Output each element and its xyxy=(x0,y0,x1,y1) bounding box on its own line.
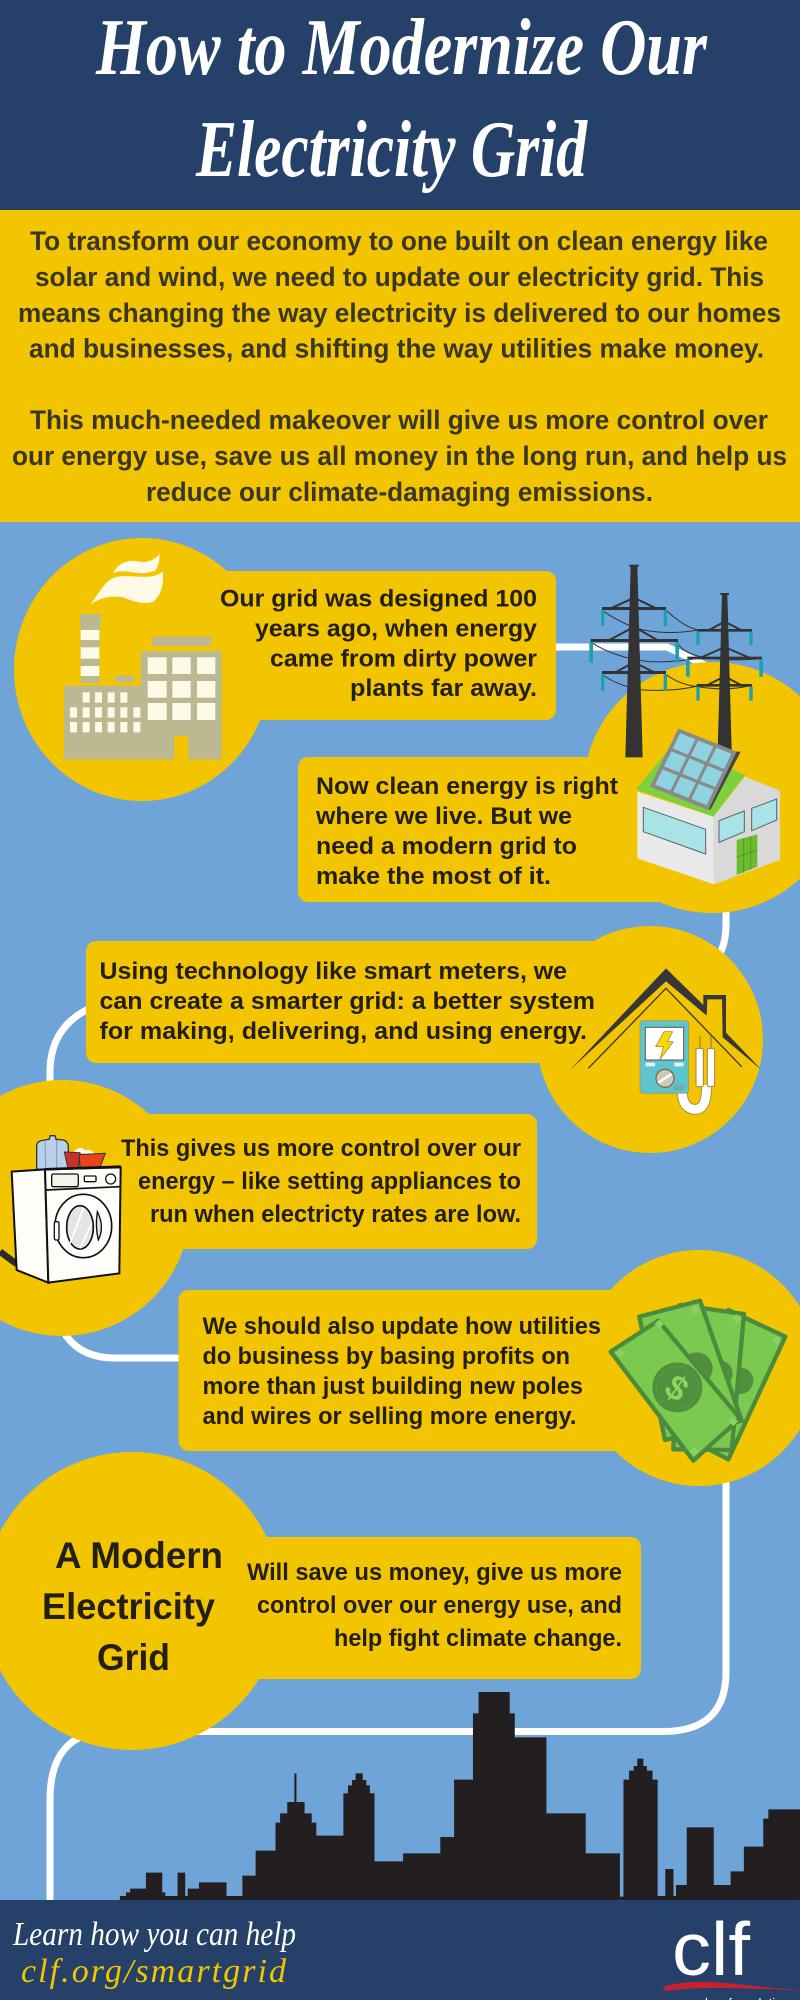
text: old grid: Our grid was designed 100 xyxy=(220,586,537,612)
text: old grid xyxy=(220,586,538,702)
text: benefits xyxy=(247,1559,622,1652)
text: smart grid xyxy=(100,958,595,1045)
text: utilities business model: do business by basing profits on xyxy=(202,1343,570,1370)
icon: factory xyxy=(64,554,222,759)
intro paragraph two: This much-needed makeover will give us more control over xyxy=(30,405,768,435)
intro paragraph one: means changing the way electricity is delivered to our homes xyxy=(18,298,781,328)
call to action: Learn how you can help xyxy=(12,1916,296,1953)
heading: a modern electricity grid: A Modern xyxy=(55,1535,223,1576)
panel: utilities business model xyxy=(178,1250,800,1486)
text: clean energy at home: where we live. But we xyxy=(315,803,572,830)
header banner xyxy=(0,0,800,210)
icon: transmission towers xyxy=(589,565,763,757)
icon: smoke xyxy=(90,554,163,605)
text: clean energy at home: Now clean energy is right xyxy=(316,773,618,800)
intro paragraph one xyxy=(18,226,781,364)
icon: smart meter in house xyxy=(570,968,762,1109)
panel: old grid xyxy=(14,538,556,801)
text: smart grid: Using technology like smart meters, we xyxy=(100,958,567,985)
text: utilities business model: We should also update how utilities xyxy=(202,1313,601,1340)
panel: smart grid xyxy=(86,926,763,1153)
text: benefits: help fight climate change. xyxy=(334,1625,622,1652)
text: clean energy at home: need a modern grid to xyxy=(316,833,577,860)
text: clean energy at home: make the most of it. xyxy=(316,863,551,890)
panel: conclusion xyxy=(0,1452,641,1750)
connecting white grid line xyxy=(50,647,726,1905)
text: more control: energy – like setting appliances to xyxy=(138,1168,521,1195)
city skyline xyxy=(120,1692,800,1901)
intro paragraph one: solar and wind, we need to update our electricity grid. This xyxy=(35,262,764,292)
icon: house with solar panel xyxy=(636,728,780,884)
text: old grid: came from dirty power xyxy=(270,646,537,672)
heading: a modern electricity grid: Electricity xyxy=(42,1586,215,1627)
footer xyxy=(0,1900,800,2000)
title xyxy=(95,4,708,194)
text: utilities business model: and wires or selling more energy. xyxy=(202,1403,576,1430)
intro paragraph two: our energy use, save us all money in the long run, and help us xyxy=(12,441,787,471)
icon: washing machine xyxy=(0,1136,121,1283)
intro paragraph one: and businesses, and shifting the way utilities make money. xyxy=(29,334,764,364)
icon: money bills: $ xyxy=(658,1368,695,1410)
text: old grid: years ago, when energy xyxy=(255,616,538,642)
logo: clf: clf xyxy=(672,1907,750,1991)
call to action: clf.org/smartgrid xyxy=(21,1953,287,1990)
text: clean energy at home xyxy=(315,773,618,890)
heading: a modern electricity grid xyxy=(42,1535,223,1678)
panel: more control xyxy=(0,1080,537,1336)
text: more control: This gives us more control over our xyxy=(121,1135,521,1162)
panel: clean energy at home xyxy=(298,565,800,913)
text: smart grid: for making, delivering, and using energy. xyxy=(100,1018,587,1045)
text: utilities business model: more than just building new poles xyxy=(202,1373,583,1400)
intro panel xyxy=(0,210,800,522)
text: benefits: control over our energy use, and xyxy=(257,1592,622,1619)
text: more control: run when electricty rates are low. xyxy=(150,1201,521,1228)
title: Electricity Grid xyxy=(195,106,588,194)
intro paragraph one: To transform our economy to one built on clean energy like xyxy=(30,226,768,256)
intro paragraph two: reduce our climate-damaging emissions. xyxy=(146,477,653,507)
intro paragraph two xyxy=(12,405,787,507)
text: old grid: plants far away. xyxy=(350,675,537,702)
call to action xyxy=(12,1916,296,1990)
text: benefits: Will save us money, give us more xyxy=(247,1559,622,1586)
text: smart grid: can create a smarter grid: a better system xyxy=(100,988,595,1015)
heading: a modern electricity grid: Grid xyxy=(97,1637,170,1678)
text: utilities business model xyxy=(202,1313,601,1430)
text: more control xyxy=(121,1135,521,1228)
logo: clf xyxy=(663,1907,800,2000)
icon: money bills xyxy=(611,1301,785,1461)
